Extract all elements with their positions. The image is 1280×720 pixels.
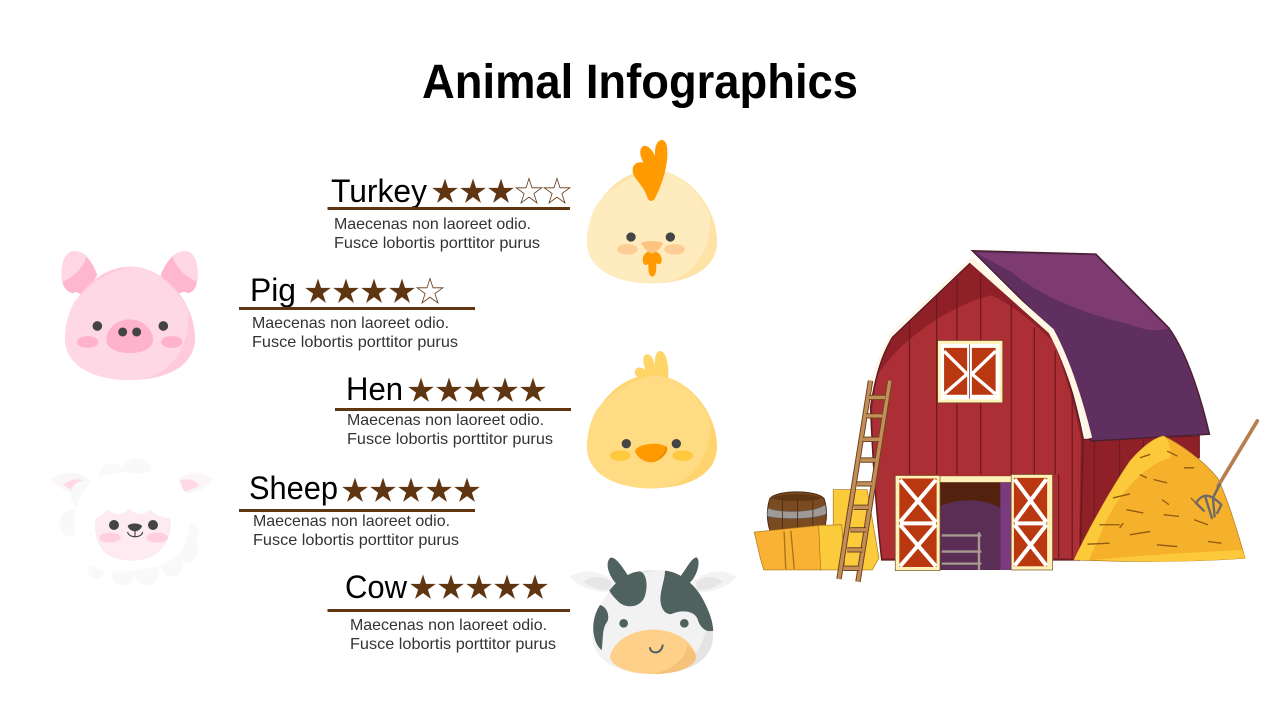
icon: hen head [587, 351, 717, 488]
pig description: Maecenas non laoreet odio. [252, 315, 449, 332]
title: Animal Infographics [422, 56, 858, 109]
hen label: Hen [346, 371, 403, 407]
left barn door [895, 476, 940, 571]
barn side wall [1079, 436, 1199, 560]
barn door opening [940, 476, 1012, 570]
hay bales [754, 490, 879, 570]
barn front wall [871, 263, 1083, 560]
panel: sheep [239, 470, 480, 549]
barn roof trim [971, 259, 1089, 438]
hen description: Maecenas non laoreet odio. [347, 412, 544, 429]
cow description: Fusce lobortis porttitor purus [350, 636, 556, 653]
cow label: Cow [345, 569, 408, 605]
sheep description: Maecenas non laoreet odio. [253, 513, 450, 530]
pig description: Fusce lobortis porttitor purus [252, 334, 458, 351]
icon: pig head [61, 251, 198, 380]
icon: cow head [570, 557, 737, 674]
hen description [347, 412, 553, 448]
cow description: Maecenas non laoreet odio. [350, 617, 547, 634]
icon: red barn with hay [754, 251, 1257, 582]
panel: hen [335, 371, 571, 448]
icon: turkey head [587, 140, 717, 283]
panel: pig [239, 272, 475, 351]
hen rating: 5 of 5 stars [408, 378, 546, 402]
ladder [839, 381, 890, 582]
sheep white fleece [74, 472, 191, 572]
barn window [938, 340, 1003, 403]
panel: cow [328, 569, 570, 653]
pig rating: 4 of 5 stars [305, 278, 443, 303]
sheep description: Fusce lobortis porttitor purus [253, 532, 459, 549]
cow description [350, 617, 556, 653]
turkey description [334, 216, 540, 252]
turkey description: Maecenas non laoreet odio. [334, 216, 531, 233]
barn roof [972, 251, 1210, 441]
sheep description [253, 513, 459, 549]
panel: turkey [328, 173, 570, 252]
icon: sheep head [51, 458, 213, 585]
hay pile [1074, 436, 1245, 562]
sheep label: Sheep [249, 470, 338, 506]
pitchfork [1196, 421, 1257, 518]
turkey description: Fusce lobortis porttitor purus [334, 235, 540, 252]
pig label: Pig [250, 272, 296, 308]
turkey rating: 3 of 5 stars [432, 178, 570, 203]
sheep rating: 5 of 5 stars [342, 478, 480, 502]
cow rating: 5 of 5 stars [410, 574, 548, 599]
barrel [767, 492, 826, 532]
hen description: Fusce lobortis porttitor purus [347, 431, 553, 448]
pig description [252, 315, 458, 351]
turkey label: Turkey [331, 173, 427, 209]
right barn door [1011, 474, 1053, 570]
